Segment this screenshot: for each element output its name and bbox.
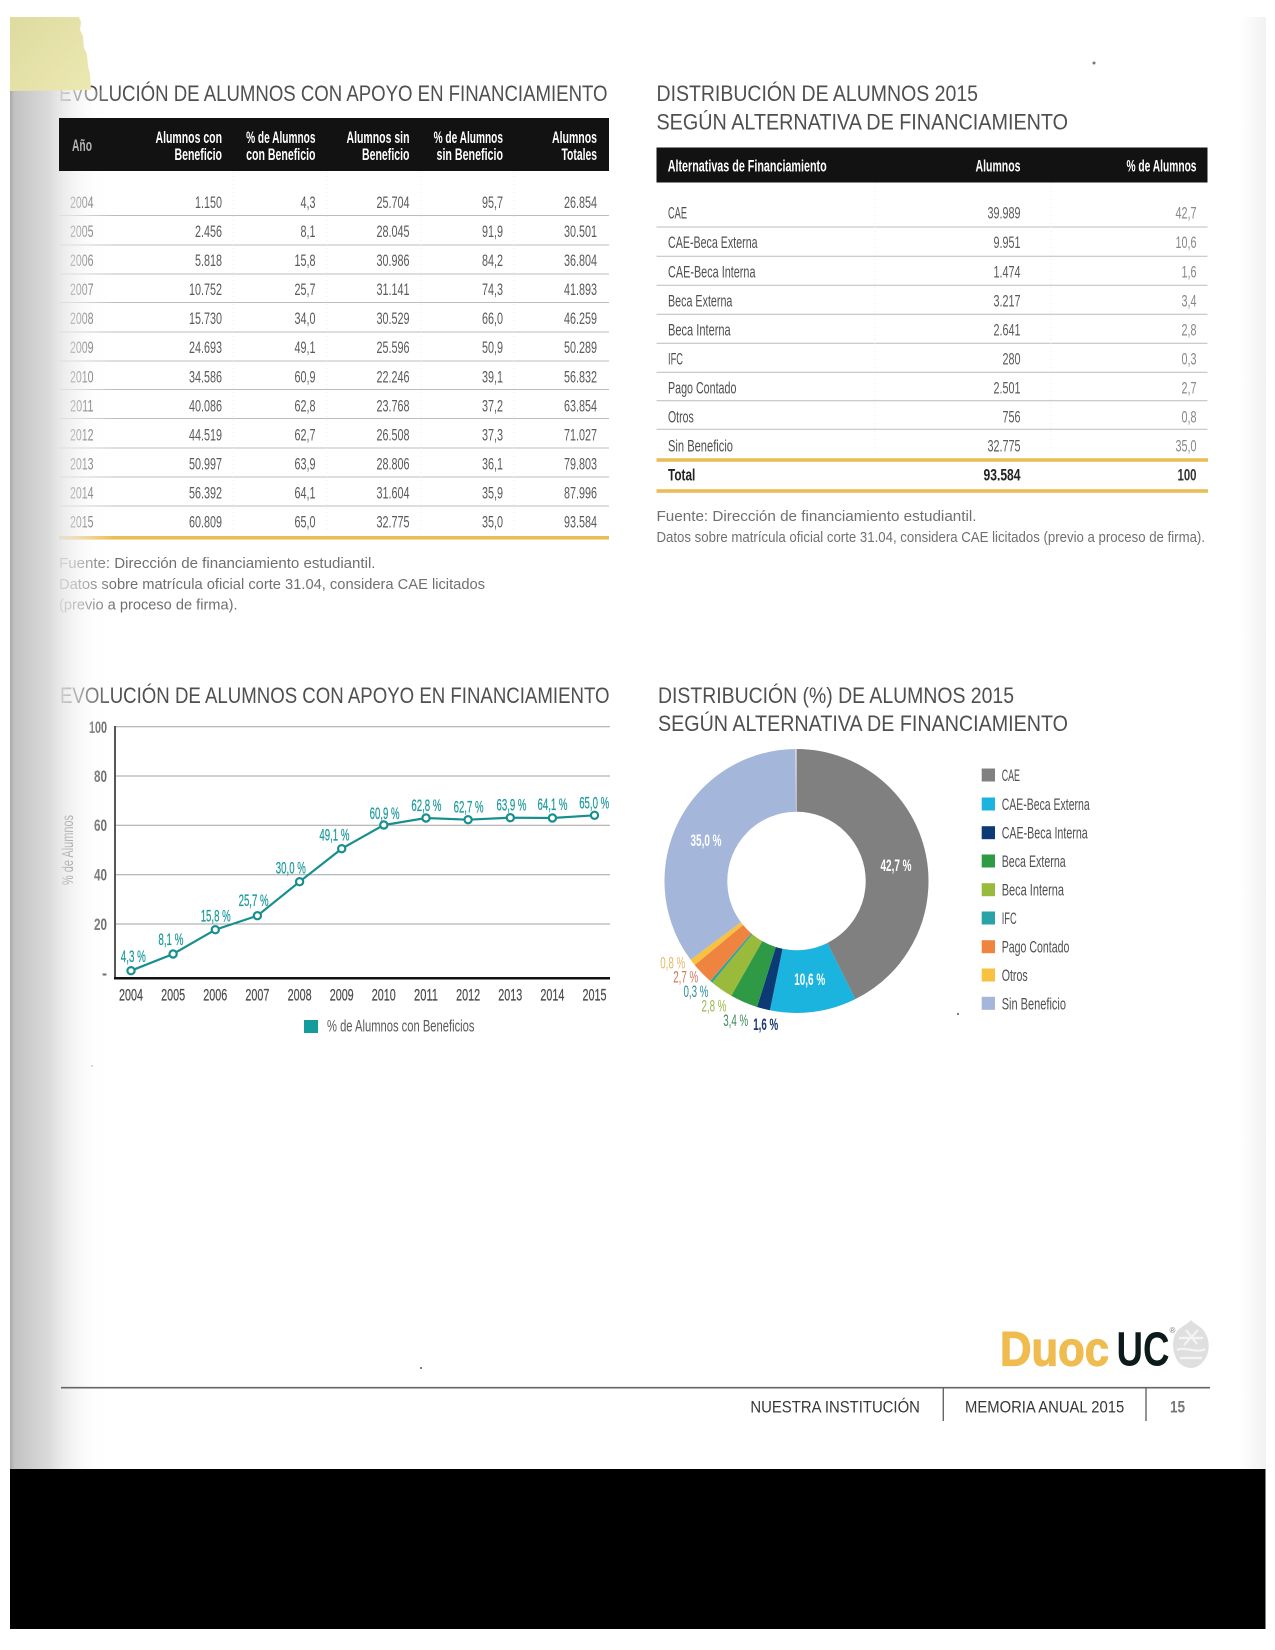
- table body rows: 2007: [70, 280, 94, 299]
- heading: donut chart: DISTRIBUCIÓN (%) DE ALUMNOS 2015: [658, 683, 1014, 708]
- source note: evolution table: Datos sobre matrícula oficial corte 31.04, considera CAE licitados: [59, 576, 485, 593]
- table body rows: 30.501: [564, 222, 597, 241]
- table body rows: 40.086: [189, 396, 222, 415]
- table header: evolution table: Alumnos: [552, 129, 597, 147]
- footer: MEMORIA ANUAL 2015: [965, 1398, 1124, 1417]
- table body rows: 74,3: [482, 280, 503, 299]
- table body rows: 91,9: [482, 222, 503, 241]
- table body rows: 46.259: [564, 309, 597, 328]
- table body rows: 37,2: [482, 396, 503, 415]
- table body rows: 36.804: [564, 251, 597, 270]
- table body rows: 1.474: [994, 262, 1020, 281]
- source note: distribution table: Fuente: Dirección de financiamiento estudiantil.: [656, 508, 976, 525]
- data labels: 15,8 %: [201, 906, 231, 926]
- table body rows: 2006: [70, 251, 94, 270]
- data labels: 62,7 %: [454, 798, 484, 816]
- y axis labels: 60: [94, 816, 107, 835]
- table body rows: 1,6: [1182, 262, 1196, 281]
- heading: distribution table: DISTRIBUCIÓN DE ALUMNOS 2015: [656, 81, 978, 106]
- table body rows: 87.996: [564, 484, 597, 502]
- table body rows: Sin Beneficio: [668, 437, 733, 456]
- table body rows: 31.141: [376, 280, 410, 299]
- table body rows: 36,1: [482, 454, 503, 473]
- table body rows: CAE: [668, 204, 687, 223]
- table body rows: 39.989: [988, 204, 1020, 223]
- table header: distribution table: [656, 148, 1208, 182]
- table body rows: 2015: [70, 512, 94, 532]
- table body rows: 756: [1002, 407, 1020, 426]
- table body rows: 2.501: [994, 378, 1020, 397]
- table body rows: 28.806: [376, 454, 410, 473]
- table body rows: 4,3: [300, 193, 316, 212]
- table body rows: 44.519: [189, 425, 222, 444]
- source note: evolution table: Fuente: Dirección de financiamiento estudiantil.: [59, 555, 376, 572]
- data labels: 30,0 %: [276, 858, 306, 878]
- table body rows: 31.604: [376, 484, 410, 502]
- table body rows: 0,8: [1182, 407, 1196, 426]
- table body rows: 28.045: [376, 222, 410, 241]
- donut legend: Pago Contado: [1002, 938, 1069, 957]
- footer: 15: [1170, 1398, 1185, 1417]
- table body rows: 25,7: [294, 280, 316, 299]
- table body rows: 35,0: [1176, 437, 1196, 456]
- table body rows: Beca Interna: [668, 320, 731, 339]
- table body rows: IFC: [668, 349, 683, 368]
- table body rows: 66,0: [482, 309, 503, 328]
- table body rows: 63,9: [294, 454, 316, 473]
- footer: [61, 1388, 1210, 1421]
- y axis labels: 20: [94, 915, 107, 934]
- logo: Duoc UC: UC: [1116, 1324, 1170, 1377]
- table header: distribution table: Alternativas de Financiamiento: [668, 158, 827, 176]
- donut legend: IFC: [1002, 909, 1017, 928]
- table body rows: 2011: [70, 396, 94, 415]
- data labels: 8,1 %: [158, 930, 183, 949]
- table body rows: 10.752: [189, 280, 222, 299]
- table header: evolution table: Totales: [562, 146, 597, 164]
- donut labels: 10,6 %: [794, 970, 825, 989]
- x axis year labels: [119, 985, 606, 1004]
- donut legend: Sin Beneficio: [1002, 994, 1066, 1013]
- table body rows: [59, 172, 609, 540]
- table body rows: 49,1: [294, 338, 316, 357]
- table body rows: 2,7: [1182, 378, 1196, 397]
- logo: Duoc UC: [1000, 1320, 1209, 1377]
- donut slices: [696, 780, 897, 982]
- donut legend: CAE-Beca Externa: [1002, 795, 1090, 814]
- panel: distribution table: [656, 81, 1208, 546]
- table body rows: 0,3: [1182, 349, 1196, 368]
- heading: distribution table: SEGÚN ALTERNATIVA DE FINANCIAMIENTO: [656, 110, 1068, 134]
- table body rows: 56.832: [564, 367, 597, 386]
- source note: distribution table: Datos sobre matrícula oficial corte 31.04, considera CAE licitados (previo a proceso de firma).: [656, 529, 1205, 546]
- table body rows: 25.596: [376, 338, 410, 357]
- table body rows: 32.775: [988, 437, 1020, 456]
- panel: donut chart: [658, 683, 1090, 1034]
- total row: 93.584: [984, 466, 1021, 485]
- x axis year labels: 2006: [203, 985, 227, 1004]
- data labels: 64,1 %: [538, 795, 568, 814]
- x axis year labels: 2015: [582, 985, 606, 1004]
- table header: evolution table: Año: [72, 137, 92, 155]
- heading: donut chart: [658, 683, 1068, 736]
- table body rows: 50,9: [482, 338, 503, 357]
- table body rows: 2,8: [1182, 320, 1196, 339]
- donut labels: 35,0 %: [690, 831, 722, 850]
- donut legend: [982, 766, 1090, 1013]
- table body rows: 2008: [70, 309, 94, 328]
- donut labels: 0,8 %: [660, 954, 685, 972]
- x axis year labels: 2004: [119, 985, 143, 1004]
- donut labels: [660, 831, 912, 1034]
- chart axes and grid: [114, 726, 610, 979]
- shadow of the book gutter: [10, 90, 115, 1469]
- table header: evolution table: con Beneficio: [246, 146, 316, 164]
- total row: 100: [1178, 466, 1196, 485]
- table body rows: Beca Externa: [668, 291, 733, 310]
- table body rows: 2005: [70, 222, 94, 241]
- table body rows: 26.854: [564, 193, 597, 212]
- table header: distribution table: Alumnos: [976, 158, 1020, 176]
- table body rows: 2012: [70, 425, 94, 444]
- table body rows: 9.951: [994, 233, 1020, 252]
- data labels: 60,9 %: [370, 804, 400, 823]
- table body rows: 26.508: [376, 425, 410, 444]
- heading: donut chart: SEGÚN ALTERNATIVA DE FINANCIAMIENTO: [658, 711, 1068, 736]
- table body rows: 25.704: [376, 193, 410, 212]
- table body rows: 2.456: [195, 222, 222, 241]
- donut labels: 0,3 %: [684, 982, 708, 1001]
- chart legend: % de Alumnos con Beneficios: [327, 1016, 474, 1036]
- table body rows: 3.217: [994, 291, 1020, 310]
- table body rows: 84,2: [482, 251, 503, 270]
- table body rows: 79.803: [564, 454, 597, 473]
- table body rows: 50.289: [564, 338, 597, 357]
- table body rows: 35,0: [482, 512, 503, 532]
- table body rows: 42,7: [1176, 204, 1196, 223]
- table header: evolution table: Alumnos sin: [346, 129, 410, 147]
- donut legend: Otros: [1002, 966, 1028, 985]
- data labels: 49,1 %: [319, 826, 349, 844]
- table body rows: 15,8: [294, 251, 316, 270]
- table body rows: 8,1: [300, 222, 316, 241]
- table body rows: Pago Contado: [668, 378, 736, 397]
- source note: evolution table: (previo a proceso de firma).: [59, 596, 238, 614]
- black scan band: [10, 1469, 1266, 1629]
- table body rows: 35,9: [482, 484, 503, 502]
- donut labels: 42,7 %: [880, 856, 912, 875]
- table header: evolution table: [59, 118, 609, 171]
- source note: evolution table: [59, 555, 485, 614]
- data labels: 63,9 %: [496, 796, 526, 814]
- table body rows: 10,6: [1176, 233, 1196, 252]
- table body rows: CAE-Beca Interna: [668, 262, 756, 281]
- x axis year labels: 2005: [161, 985, 185, 1004]
- table body rows: 3,4: [1182, 291, 1196, 310]
- donut legend: CAE-Beca Interna: [1002, 824, 1088, 843]
- table body rows: 34,0: [294, 309, 316, 328]
- table body rows: 2004: [70, 193, 94, 212]
- table body rows: 24.693: [189, 338, 222, 357]
- table body rows: Otros: [668, 407, 694, 426]
- table body rows: [656, 183, 1208, 456]
- table header: evolution table: Alumnos con: [156, 129, 222, 147]
- data labels: 62,8 %: [411, 796, 441, 815]
- table body rows: 60,9: [294, 367, 316, 386]
- table body rows: CAE-Beca Externa: [668, 233, 758, 252]
- x axis year labels: 2009: [330, 985, 354, 1004]
- x axis year labels: 2008: [288, 985, 312, 1004]
- table body rows: 56.392: [189, 484, 222, 502]
- table body rows: 280: [1002, 349, 1020, 368]
- data labels: [121, 794, 609, 966]
- table body rows: 50.997: [189, 454, 222, 473]
- table body rows: 2.641: [994, 320, 1020, 339]
- table body rows: 2014: [70, 484, 94, 502]
- table body rows: 65,0: [294, 512, 316, 532]
- table header: evolution table: % de Alumnos: [434, 129, 503, 147]
- source note: distribution table: [656, 508, 1205, 546]
- x axis year labels: 2007: [245, 985, 269, 1004]
- table body rows: 32.775: [376, 512, 410, 532]
- table body rows: 34.586: [189, 367, 222, 386]
- donut legend: Beca Externa: [1002, 852, 1066, 871]
- donut legend: CAE: [1002, 766, 1020, 785]
- donut labels: 1,6 %: [753, 1015, 778, 1034]
- table header: evolution table: Beneficio: [362, 146, 410, 164]
- table body rows: 62,8: [294, 396, 316, 415]
- panel: student evolution table: [59, 81, 609, 614]
- table body rows: 1.150: [195, 193, 222, 212]
- data line: [127, 812, 598, 974]
- table body rows: 41.893: [564, 280, 597, 299]
- logo: Duoc UC: Duoc: [1000, 1324, 1109, 1377]
- total row: Total: [668, 466, 695, 485]
- x axis year labels: 2013: [498, 985, 522, 1004]
- y axis labels: 100: [89, 718, 107, 737]
- table body rows: 2009: [70, 338, 94, 357]
- table body rows: 39,1: [482, 367, 503, 386]
- y axis labels: 40: [94, 866, 107, 884]
- table body rows: 62,7: [294, 425, 316, 444]
- data labels: 4,3 %: [121, 947, 146, 966]
- table body rows: 22.246: [376, 367, 410, 386]
- footer: NUESTRA INSTITUCIÓN: [750, 1398, 920, 1417]
- table body rows: 60.809: [189, 512, 222, 532]
- x axis year labels: 2011: [414, 985, 438, 1004]
- y axis labels: % de Alumnos: [60, 815, 77, 885]
- table body rows: 95,7: [482, 193, 503, 212]
- x axis year labels: 2010: [372, 985, 396, 1004]
- donut legend: Beca Interna: [1002, 881, 1064, 900]
- table body rows: 93.584: [564, 512, 597, 532]
- heading: evolution table: EVOLUCIÓN DE ALUMNOS CON APOYO EN FINANCIAMIENTO: [59, 81, 608, 106]
- panel: line chart: [60, 683, 610, 1036]
- table body rows: 64,1: [294, 484, 316, 502]
- data labels: 65,0 %: [579, 794, 609, 812]
- table body rows: 30.529: [376, 309, 410, 328]
- total row: [656, 458, 1208, 493]
- table body rows: 15.730: [189, 309, 222, 328]
- table header: distribution table: % de Alumnos: [1126, 158, 1196, 176]
- table body rows: 63.854: [564, 396, 597, 415]
- table body rows: 23.768: [376, 396, 410, 415]
- donut labels: 2,7 %: [673, 968, 698, 986]
- y axis labels: -: [102, 964, 107, 983]
- table body rows: 71.027: [564, 425, 597, 444]
- logo: Duoc UC: ®: [1170, 1326, 1176, 1335]
- y axis labels: 80: [94, 767, 107, 786]
- table body rows: 30.986: [376, 251, 410, 270]
- table header: evolution table: Beneficio: [174, 146, 222, 164]
- table body rows: 2013: [70, 454, 94, 473]
- table header: evolution table: sin Beneficio: [436, 146, 503, 164]
- data labels: 25,7 %: [239, 891, 269, 910]
- table body rows: 5.818: [195, 251, 222, 270]
- donut labels: 3,4 %: [723, 1011, 748, 1030]
- chart legend: [304, 1016, 474, 1036]
- table body rows: 2010: [70, 367, 94, 386]
- x axis year labels: 2012: [456, 985, 480, 1004]
- heading: distribution table: [656, 81, 1068, 134]
- y axis labels: [60, 718, 107, 983]
- table body rows: 37,3: [482, 425, 503, 444]
- x axis year labels: 2014: [540, 985, 564, 1004]
- table header: evolution table: % de Alumnos: [246, 129, 316, 147]
- heading: line chart: EVOLUCIÓN DE ALUMNOS CON APOYO EN FINANCIAMIENTO: [60, 683, 610, 708]
- sticky note: [10, 17, 91, 91]
- donut labels: 2,8 %: [702, 996, 726, 1016]
